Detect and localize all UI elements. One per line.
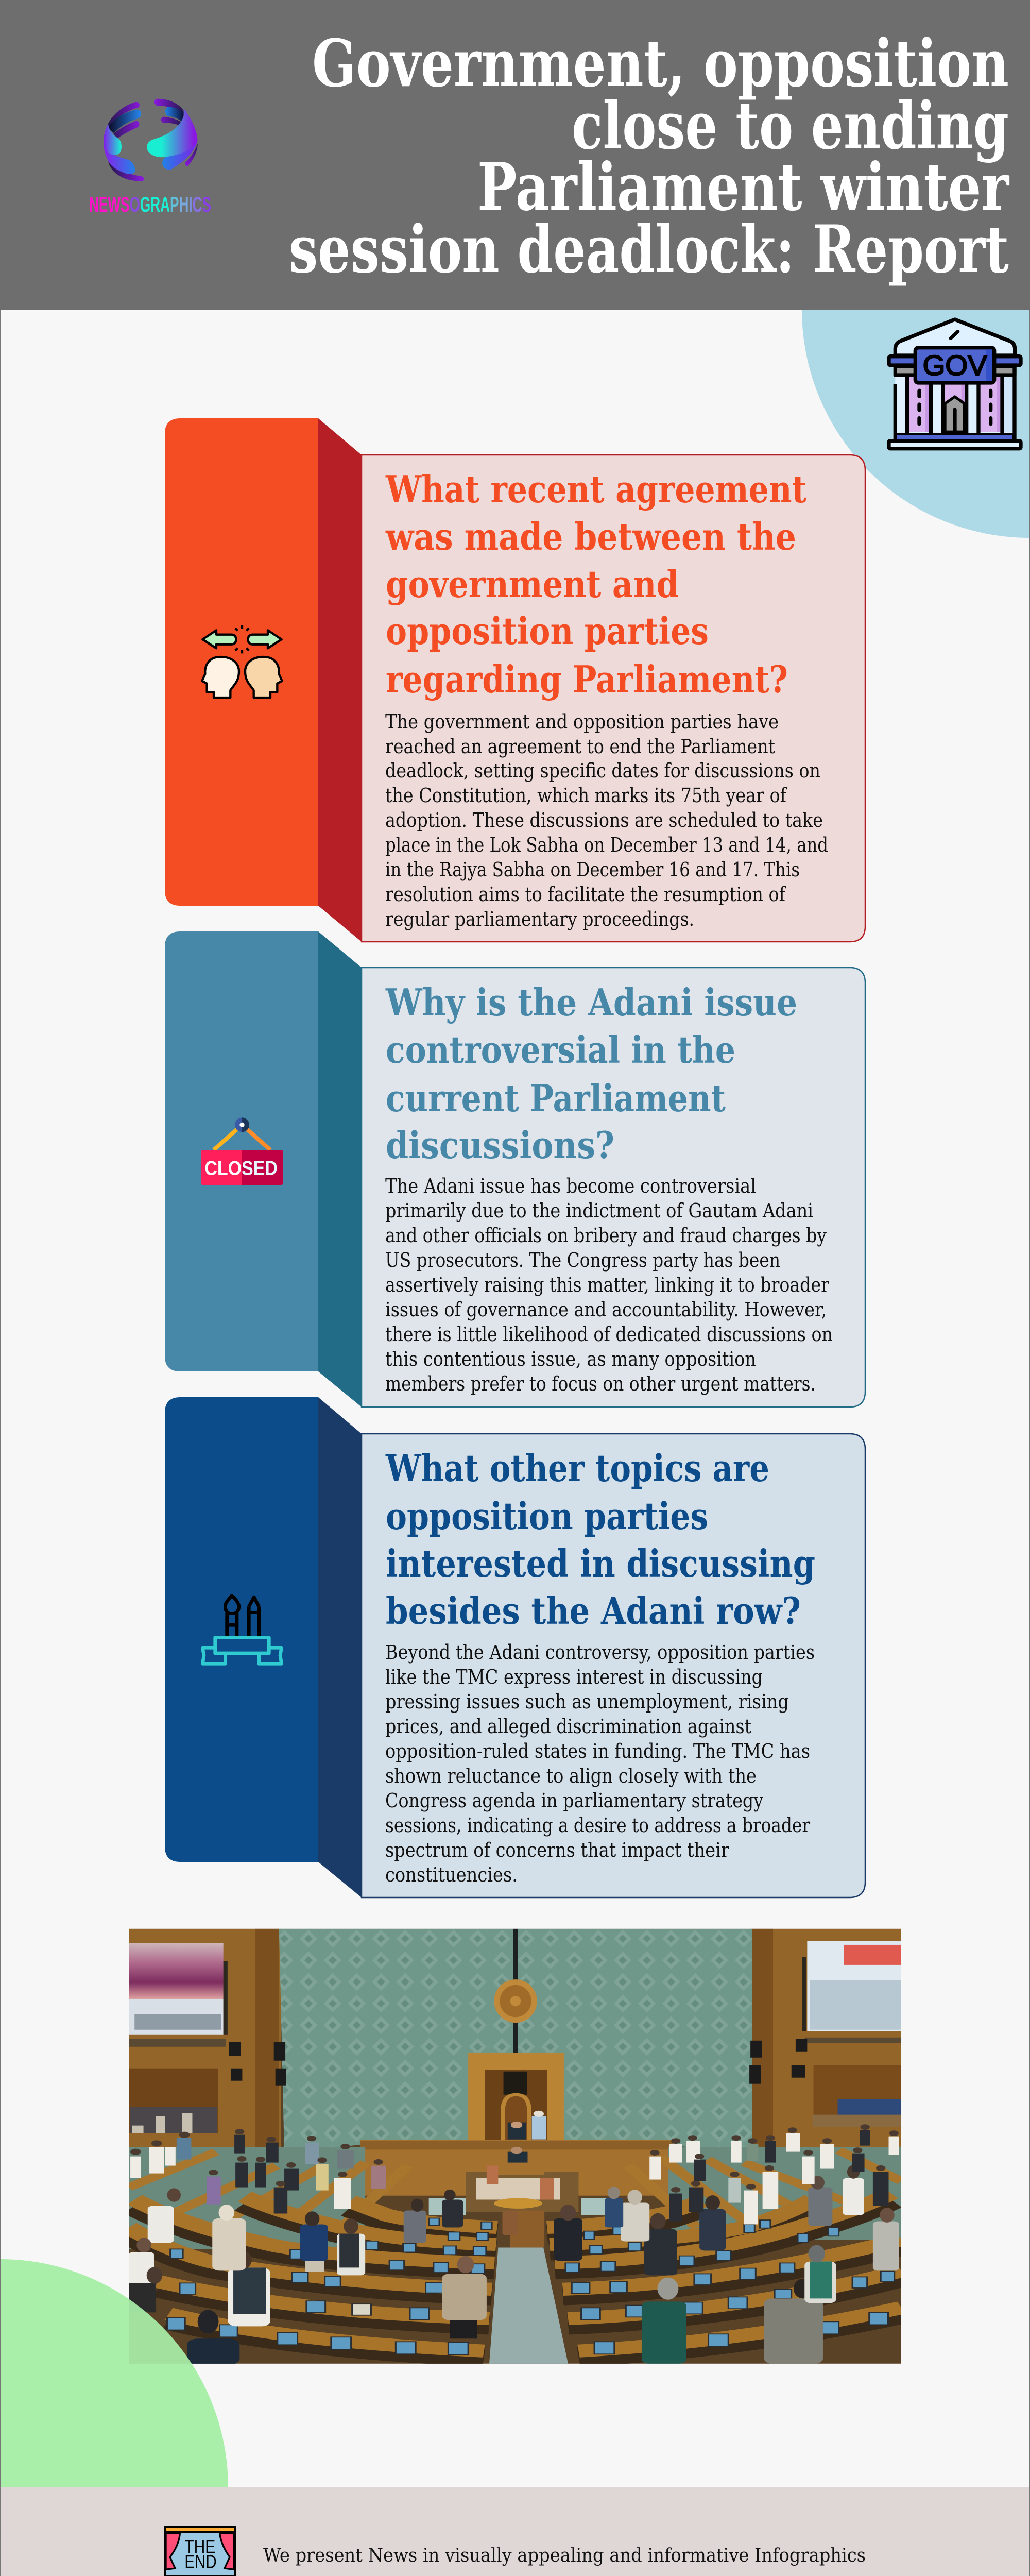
body text: there is little likelihood of dedicated discussions on	[385, 1323, 833, 1346]
panel: Adani issue	[165, 931, 865, 1407]
body text: prices, and alleged discrimination against	[385, 1715, 751, 1738]
heading: regarding Parliament?	[386, 657, 788, 701]
body text	[385, 1641, 815, 1886]
header band	[0, 0, 1030, 310]
icon: closed sign: CLOSED	[204, 1157, 278, 1179]
decorative blue circle	[802, 81, 1030, 538]
logo wordmark: NEWSOGRAPHICS	[89, 192, 211, 216]
body text: Beyond the Adani controversy, opposition parties	[385, 1641, 815, 1664]
heading: opposition parties	[386, 609, 709, 653]
body text: US prosecutors. The Congress party has been	[385, 1249, 780, 1272]
body text	[385, 710, 828, 930]
green circle overlay on photo	[129, 2299, 192, 2364]
body text	[385, 1175, 833, 1395]
body text: members prefer to focus on other urgent matters.	[385, 1372, 816, 1395]
title	[289, 25, 1009, 287]
icon: closed sign	[201, 1117, 283, 1185]
body text: deadlock, setting specific dates for discussions on	[385, 759, 820, 782]
body text: constituencies.	[385, 1863, 518, 1886]
heading: current Parliament	[386, 1076, 726, 1120]
body text: resolution aims to facilitate the resumption of	[385, 883, 787, 906]
heading: Why is the Adani issue	[385, 980, 797, 1024]
body text: primarily due to the indictment of Gautam Adani	[385, 1199, 813, 1222]
decorative green circle	[0, 2259, 228, 2576]
body text: Congress agenda in parliamentary strategy	[385, 1789, 763, 1812]
icon: government building: GOV	[923, 349, 987, 381]
heading: interested in discussing	[386, 1541, 815, 1585]
body text: sessions, indicating a desire to address a broader	[385, 1814, 811, 1837]
heading	[385, 1446, 815, 1633]
icon: the end curtain	[164, 2526, 236, 2576]
heading: opposition parties	[386, 1494, 708, 1538]
panel: other topics	[165, 1397, 865, 1897]
heading	[385, 980, 797, 1167]
body text: assertively raising this matter, linking it to broader	[385, 1274, 830, 1296]
heading: controversial in the	[386, 1028, 735, 1072]
heading: What other topics are	[385, 1446, 769, 1490]
panel: recent agreement	[165, 418, 865, 942]
body text: like the TMC express interest in discussing	[385, 1666, 763, 1688]
body text: regular parliamentary proceedings.	[385, 908, 694, 930]
closing band	[0, 2487, 1030, 2576]
icon: the end curtain: THE	[184, 2536, 215, 2557]
heading: was made between the	[385, 515, 796, 558]
body text: The Adani issue has become controversial	[385, 1175, 756, 1197]
body text: and other officials on bribery and fraud charges by	[385, 1224, 827, 1247]
body text: in the Rajya Sabha on December 16 and 17. This	[385, 858, 800, 881]
body text: shown reluctance to align closely with the	[385, 1765, 757, 1787]
icon: two heads with opposing arrows	[202, 625, 282, 698]
body text: opposition-ruled states in funding. The TMC has	[385, 1740, 810, 1762]
heading: besides the Adani row?	[386, 1589, 801, 1633]
heading: government and	[386, 562, 679, 606]
body text: The government and opposition parties have	[385, 710, 779, 733]
body text: this contentious issue, as many opposition	[385, 1348, 756, 1370]
heading	[385, 467, 806, 701]
body text: issues of governance and accountability. However,	[385, 1298, 827, 1321]
body text: pressing issues such as unemployment, rising	[385, 1690, 789, 1713]
icon: government building	[889, 319, 1021, 449]
heading: discussions?	[386, 1123, 614, 1167]
photo: Lok Sabha chamber	[129, 1929, 901, 2365]
icon: brush and pencil on ribbon	[202, 1596, 282, 1664]
body text: adoption. These discussions are scheduled to take	[385, 809, 823, 832]
body text: reached an agreement to end the Parliament	[385, 735, 775, 758]
logo: Newsographics header	[104, 99, 198, 181]
icon: the end curtain: END	[184, 2551, 217, 2572]
tagline: We present News in visually appealing and informative Infographics	[263, 2545, 866, 2566]
body text: place in the Lok Sabha on December 13 and 14, and	[385, 834, 828, 856]
body text: the Constitution, which marks its 75th year of	[385, 784, 788, 807]
body text: spectrum of concerns that impact their	[385, 1839, 730, 1861]
heading: What recent agreement	[385, 467, 806, 511]
